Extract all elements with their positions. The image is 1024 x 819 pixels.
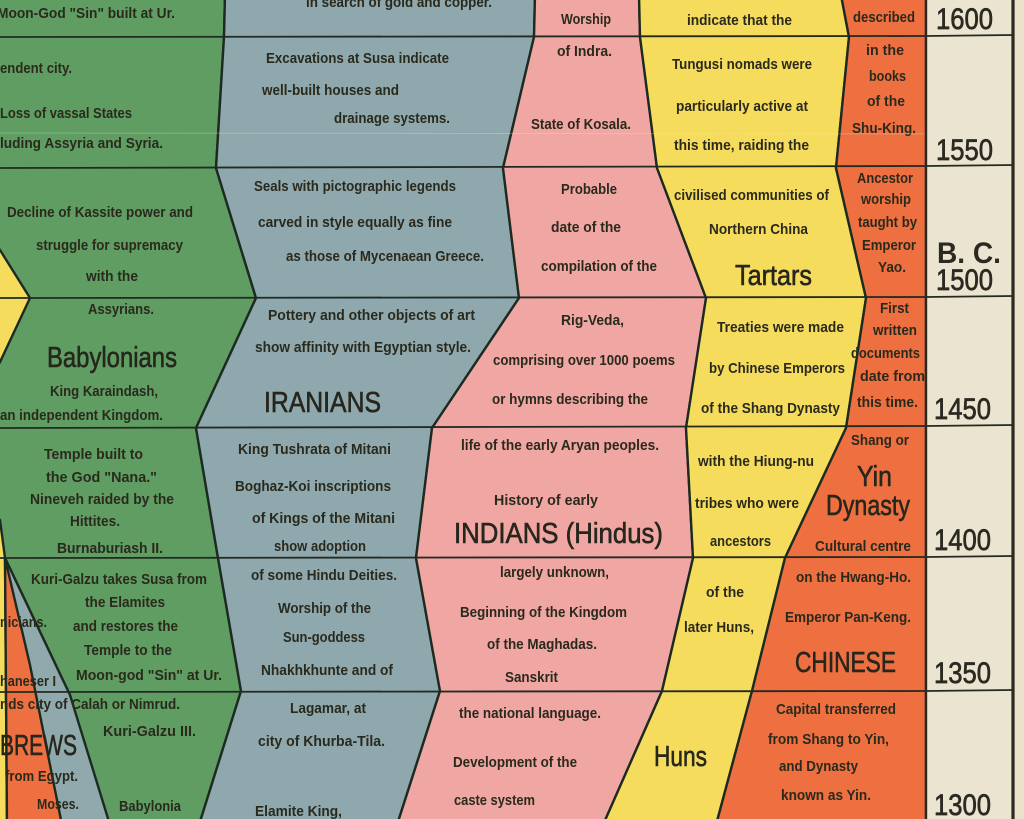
Tartars text: Huns: [654, 741, 707, 773]
Babylonians text: an independent Kingdom.: [0, 407, 163, 424]
Indians text: compilation of the: [541, 258, 657, 275]
Babylonians text: [0, 5, 222, 815]
Iranians text: of Kings of the Mitani: [252, 510, 395, 527]
Indians text: INDIANS (Hindus): [454, 518, 663, 550]
Chinese text: known as Yin.: [781, 787, 871, 804]
panel: Indians column: [397, 0, 706, 819]
Tartars text: of the Shang Dynasty: [701, 400, 841, 417]
Chinese text: Ancestor: [857, 170, 913, 187]
Chinese text: Emperor: [862, 237, 916, 254]
Tartars text: this time, raiding the: [674, 137, 809, 154]
Indians text: Worship: [561, 11, 611, 28]
Indians text: of the Maghadas.: [487, 636, 597, 653]
yellow sliver lower left: [0, 515, 7, 819]
Tartars text: indicate that the: [687, 12, 792, 29]
Chinese text: in the: [866, 42, 904, 59]
orange column shape: [716, 0, 926, 819]
Babylonians text: struggle for supremacy: [36, 237, 184, 254]
Iranians text: drainage systems.: [334, 110, 450, 127]
Chinese text: Shu-King.: [852, 120, 916, 137]
Chinese text: Yao.: [878, 259, 906, 276]
Chinese text: from Shang to Yin,: [768, 731, 889, 748]
panel: Hebrews and Phoenicians wedges: [0, 558, 180, 819]
Chinese text: First: [880, 300, 909, 317]
year 1500: 1500: [936, 264, 993, 297]
Iranians text: Worship of the: [278, 600, 371, 617]
Chinese text: taught by: [858, 214, 918, 231]
Tartars text: Tungusi nomads were: [672, 56, 812, 73]
Babylonians text: Moon-god "Sin" at Ur.: [76, 667, 222, 684]
Indians text: comprising over 1000 poems: [493, 352, 675, 369]
Babylonians text: Loss of vassal States: [0, 105, 132, 122]
Tartars text: by Chinese Emperors: [709, 360, 845, 377]
wedge text: nds city of Calah or Nimrud.: [0, 696, 180, 713]
Chinese text: Shang or: [851, 432, 909, 449]
Chinese text: of the: [867, 93, 905, 110]
Babylonians text: King Karaindash,: [50, 383, 158, 400]
Babylonians text: luding Assyria and Syria.: [0, 135, 163, 152]
Iranians text: [235, 0, 492, 819]
Iranians text: carved in style equally as fine: [258, 214, 452, 231]
year 1350: 1350: [934, 657, 991, 690]
Babylonians text: and restores the: [73, 618, 178, 635]
Iranians text: well-built houses and: [261, 82, 399, 99]
Babylonians text: the Elamites: [85, 594, 165, 611]
panel: Chinese column: [716, 0, 926, 819]
yellow wedge upper left: [0, 243, 30, 370]
Chinese text: written: [872, 322, 917, 339]
Chinese text: this time.: [857, 394, 918, 411]
Tartars text: civilised communities of: [674, 187, 830, 204]
green column shape: [0, 0, 256, 819]
Indians text: Probable: [561, 181, 617, 198]
panel: Babylonians column: [0, 0, 256, 819]
Iranians text: Sun-goddess: [283, 629, 365, 646]
Iranians text: King Tushrata of Mitani: [238, 441, 391, 458]
Iranians text: Pottery and other objects of art: [268, 307, 475, 324]
blue column shape: [196, 0, 535, 819]
Indians text: Beginning of the Kingdom: [460, 604, 627, 621]
Indians text: [453, 11, 675, 809]
Babylonians text: Nineveh raided by the: [30, 491, 174, 508]
yellow column shape: [603, 0, 866, 819]
Chinese text: Capital transferred: [776, 701, 896, 718]
era label B.C.: B. C.: [937, 237, 1001, 270]
Iranians text: show adoption: [274, 538, 366, 555]
Babylonians text: Hittites.: [70, 513, 120, 530]
Tartars text: ancestors: [710, 533, 771, 550]
Tartars text: [654, 12, 845, 773]
Babylonians text: endent city.: [0, 60, 72, 77]
Tartars text: of the: [706, 584, 744, 601]
Indians text: life of the early Aryan peoples.: [461, 437, 659, 454]
Indians text: State of Kosala.: [531, 116, 631, 133]
Iranians text: city of Khurba-Tila.: [258, 733, 385, 750]
Tartars text: with the Hiung-nu: [697, 453, 814, 470]
Babylonians text: Babylonia: [119, 798, 182, 815]
orange wedge: [5, 558, 62, 819]
Iranians text: Seals with pictographic legends: [254, 178, 456, 195]
Babylonians text: Temple built to: [44, 446, 143, 463]
Iranians text: as those of Mycenaean Greece.: [286, 248, 484, 265]
Indians text: date of the: [551, 219, 621, 236]
Chinese text: worship: [860, 191, 911, 208]
Chinese text: CHINESE: [795, 647, 896, 679]
Indians text: Development of the: [453, 754, 577, 771]
Indians text: Rig-Veda,: [561, 312, 624, 329]
panel: Iranians column: [196, 0, 535, 819]
year 1400: 1400: [934, 524, 991, 557]
Indians text: of Indra.: [557, 43, 612, 60]
Babylonians text: Moon-God "Sin" built at Ur.: [0, 5, 175, 22]
Iranians text: IRANIANS: [264, 387, 381, 419]
Iranians text: of some Hindu Deities.: [251, 567, 397, 584]
Tartars text: Northern China: [709, 221, 809, 238]
Indians text: caste system: [454, 792, 535, 809]
Chinese text: books: [869, 68, 906, 85]
wedge text: BREWS: [0, 730, 77, 762]
wedge text: haneser I: [0, 673, 56, 690]
wedge text: nicians.: [0, 614, 47, 631]
Iranians text: Lagamar, at: [290, 700, 366, 717]
Babylonians text: Kuri-Galzu takes Susa from: [31, 571, 207, 588]
Chinese text: Yin: [857, 461, 892, 493]
Tartars text: tribes who were: [695, 495, 799, 512]
Tartars text: later Huns,: [684, 619, 754, 636]
Chinese text: Dynasty: [826, 490, 910, 522]
Indians text: largely unknown,: [500, 564, 609, 581]
Babylonians text: Babylonians: [47, 342, 177, 374]
Babylonians text: Assyrians.: [88, 301, 154, 318]
wedge text: from Egypt.: [5, 768, 78, 785]
Indians text: History of early: [494, 492, 599, 509]
Babylonians text: Temple to the: [84, 642, 172, 659]
Tartars text: particularly active at: [676, 98, 808, 115]
Indians text: or hymns describing the: [492, 391, 648, 408]
Chinese text: date from: [860, 368, 925, 385]
Babylonians text: with the: [85, 268, 138, 285]
year 1550: 1550: [936, 134, 993, 167]
wedge text: Moses.: [37, 796, 79, 813]
Chinese text: Emperor Pan-Keng.: [785, 609, 911, 626]
blue wedge: [5, 558, 110, 819]
panel: timeline years: [934, 3, 1001, 819]
Chinese text: on the Hwang-Ho.: [796, 569, 911, 586]
Iranians text: show affinity with Egyptian style.: [255, 339, 471, 356]
Indians text: the national language.: [459, 705, 601, 722]
Chinese text: [768, 9, 925, 804]
Tartars text: Treaties were made: [717, 319, 844, 336]
Chinese text: described: [853, 9, 915, 26]
year 1450: 1450: [934, 393, 991, 426]
year 1600: 1600: [936, 3, 993, 36]
Chinese text: and Dynasty: [779, 758, 859, 775]
panel: Tartars and Huns column: [603, 0, 866, 819]
Chinese text: documents: [851, 345, 920, 362]
Iranians text: Boghaz-Koi inscriptions: [235, 478, 391, 495]
Babylonians text: the God "Nana.": [46, 469, 157, 486]
Iranians text: Nhakhkhunte and of: [261, 662, 394, 679]
wedge text: [0, 614, 180, 813]
pink column shape: [397, 0, 706, 819]
Indians text: Sanskrit: [505, 669, 558, 686]
Iranians text: Excavations at Susa indicate: [266, 50, 449, 67]
Tartars text: Tartars: [735, 260, 812, 292]
Babylonians text: Burnaburiash II.: [57, 540, 163, 557]
Babylonians text: Kuri-Galzu III.: [103, 723, 196, 740]
Chinese text: Cultural centre: [815, 538, 911, 555]
Babylonians text: Decline of Kassite power and: [7, 204, 193, 221]
